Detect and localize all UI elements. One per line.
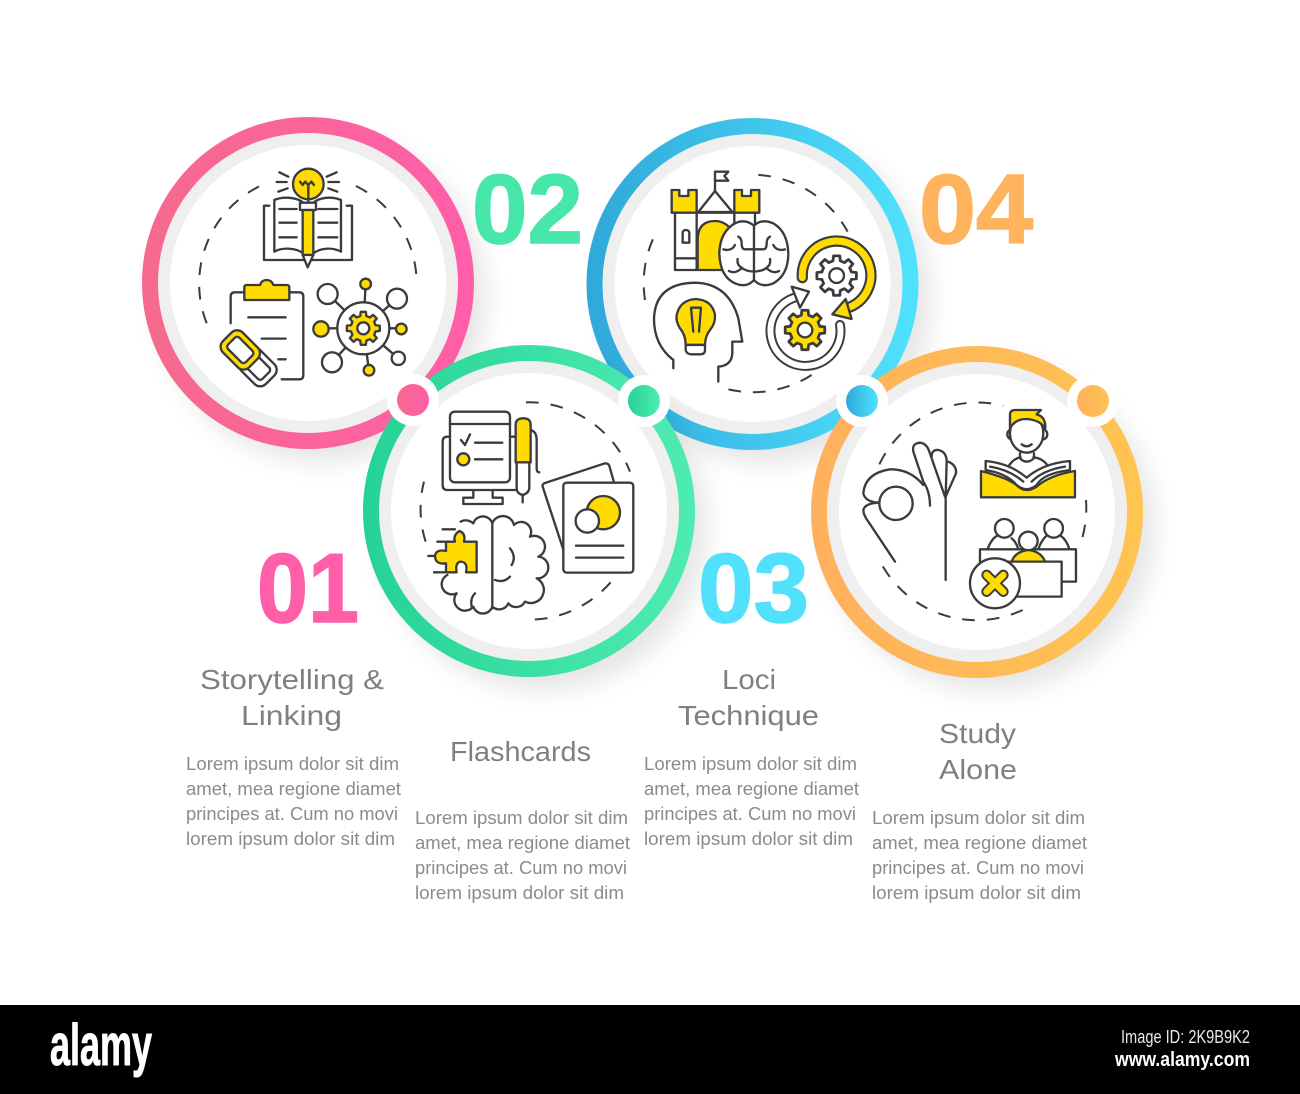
text block: step 2 description bbox=[415, 808, 630, 903]
footer: stock image bar: www.alamy.com bbox=[1114, 1049, 1250, 1071]
text block: step 3 description: amet, mea regione diamet bbox=[644, 779, 859, 799]
text block: step 4 description bbox=[872, 808, 1087, 903]
heading: loci technique: Technique bbox=[678, 700, 819, 731]
text block: step 2 description: Lorem ipsum dolor sit dim bbox=[415, 808, 628, 828]
text block: step 1 description: amet, mea regione diamet bbox=[186, 779, 401, 799]
heading: flashcards: Flashcards bbox=[450, 736, 591, 767]
text block: step 1 description bbox=[186, 754, 401, 849]
heading: storytelling and linking: Storytelling & bbox=[200, 664, 384, 695]
number 01: 01 bbox=[257, 533, 359, 643]
panel: step 1 circle bbox=[142, 117, 486, 462]
connector dot: pink bbox=[387, 374, 439, 426]
panel: step 2 circle bbox=[363, 345, 707, 690]
heading: storytelling and linking bbox=[200, 664, 384, 731]
text block: step 2 description: amet, mea regione diamet bbox=[415, 833, 630, 853]
text block: step 2 description: lorem ipsum dolor sit dim bbox=[415, 883, 624, 903]
panel: step 4 circle bbox=[811, 346, 1155, 691]
connector dot: blue bbox=[836, 375, 888, 427]
heading: study alone: Study bbox=[939, 718, 1016, 749]
heading: loci technique bbox=[678, 664, 819, 731]
text block: step 3 description bbox=[644, 754, 859, 849]
text block: step 4 description: lorem ipsum dolor sit dim bbox=[872, 883, 1081, 903]
text block: step 3 description: lorem ipsum dolor sit dim bbox=[644, 829, 853, 849]
text block: step 4 description: Lorem ipsum dolor sit dim bbox=[872, 808, 1085, 828]
panel: step 3 circle bbox=[586, 118, 931, 463]
footer: stock image bar bbox=[0, 1005, 1300, 1094]
heading: study alone: Alone bbox=[939, 754, 1017, 785]
connector dot: green bbox=[618, 375, 670, 427]
text block: step 1 description: Lorem ipsum dolor sit dim bbox=[186, 754, 399, 774]
text block: step 4 description: amet, mea regione diamet bbox=[872, 833, 1087, 853]
heading: study alone bbox=[939, 718, 1017, 785]
footer: stock image bar: alamy bbox=[50, 1013, 152, 1078]
number 03: 03 bbox=[698, 533, 809, 643]
text block: step 3 description: Lorem ipsum dolor sit dim bbox=[644, 754, 857, 774]
text block: step 1 description: principes at. Cum no movi bbox=[186, 804, 398, 824]
icon: loci technique bbox=[644, 172, 871, 392]
heading: loci technique: Loci bbox=[722, 664, 776, 695]
footer: stock image bar: Image ID: 2K9B9K2 bbox=[1121, 1027, 1250, 1047]
connector dot: orange bbox=[1067, 375, 1119, 427]
text block: step 3 description: principes at. Cum no movi bbox=[644, 804, 856, 824]
icon: study alone bbox=[863, 403, 1086, 620]
text block: step 2 description: principes at. Cum no movi bbox=[415, 858, 627, 878]
text block: step 4 description: principes at. Cum no movi bbox=[872, 858, 1084, 878]
icon: storytelling and linking bbox=[199, 169, 417, 390]
number 04: 04 bbox=[919, 154, 1033, 264]
heading: storytelling and linking: Linking bbox=[241, 700, 342, 731]
text block: step 1 description: lorem ipsum dolor sit dim bbox=[186, 829, 395, 849]
icon: flashcards bbox=[421, 402, 633, 620]
number 02: 02 bbox=[472, 154, 583, 264]
